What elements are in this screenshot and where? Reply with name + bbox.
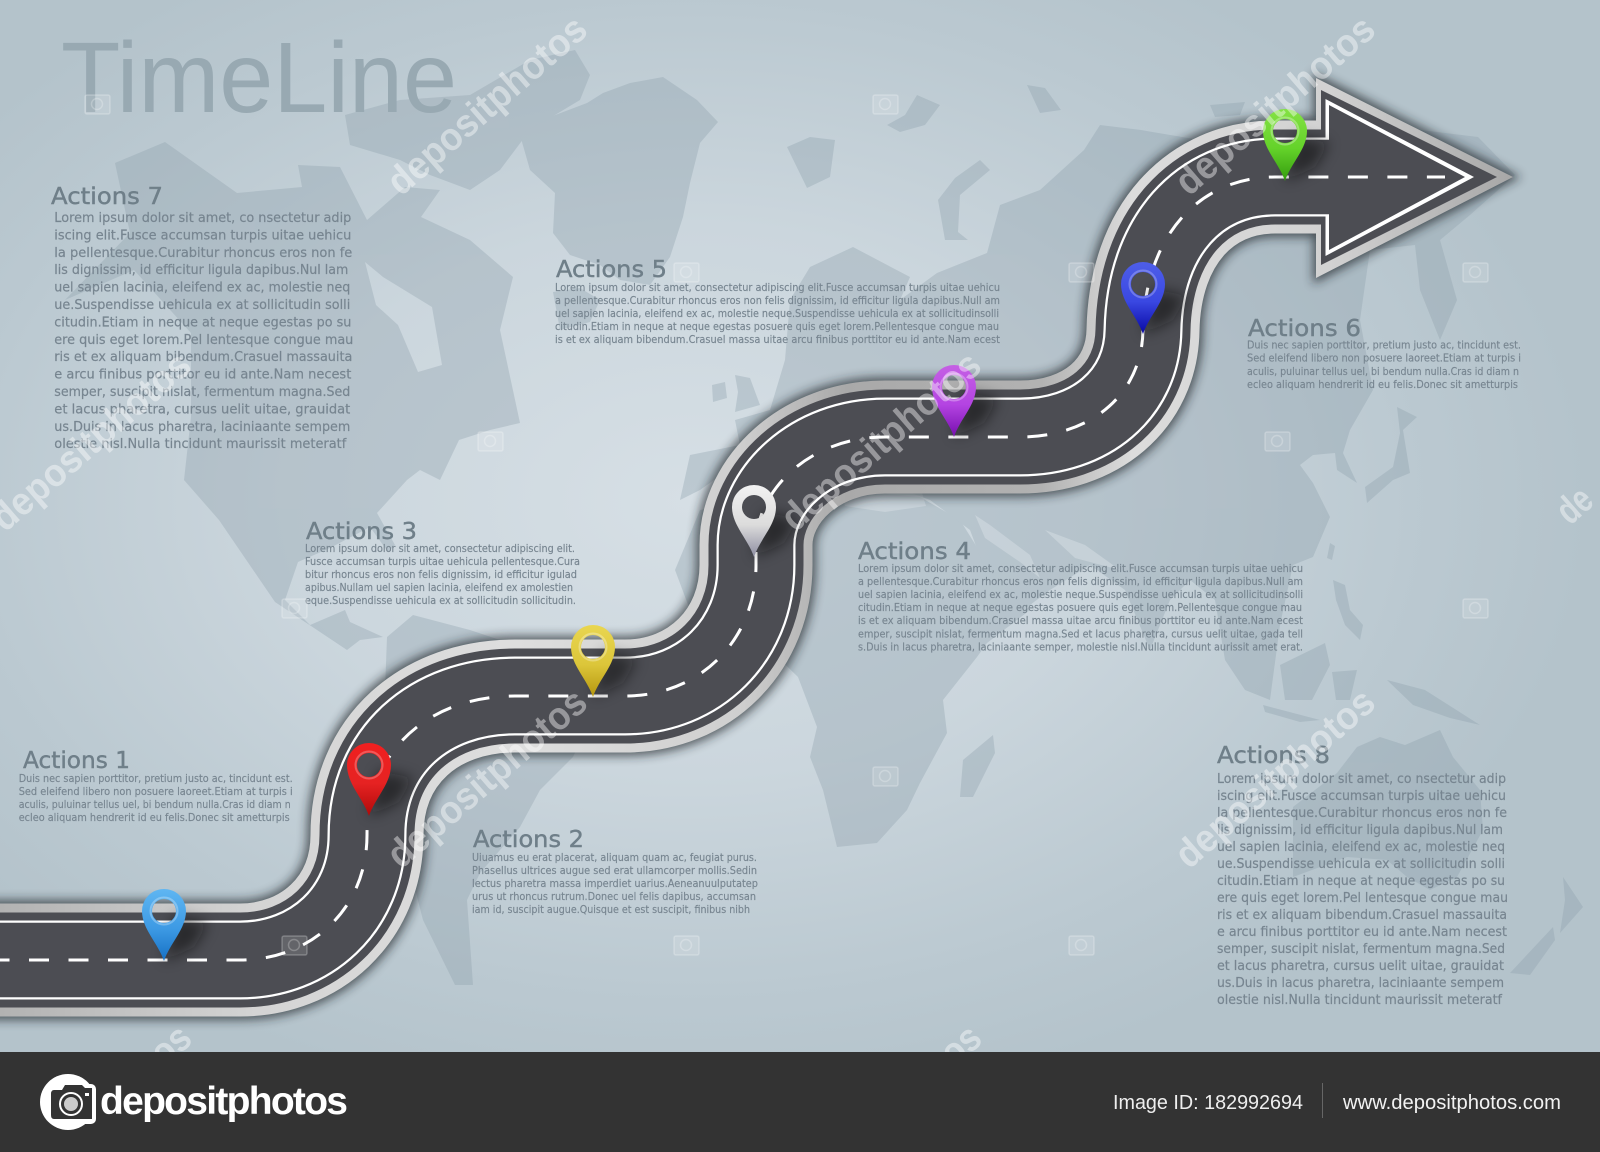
map: svalbard and franz josef (787, 85, 1245, 188)
text block: actions 4: s.Duis in lacus pharetra, laciniaante semper, molestie nisl.Nulla tincidunt aurissit amet erat. (858, 642, 1303, 654)
map: arctic islands (345, 50, 590, 190)
text block: actions 3 (305, 517, 580, 607)
text block: actions 8: et lacus pharetra, cursus uelit uitae, grauidat (1217, 959, 1504, 974)
road white edge lines (0, 99, 1474, 960)
road outer band (0, 78, 1513, 960)
text block: actions 2: lectus pharetra massa imperdiet uarius.Aeneanuulputatep (472, 878, 758, 890)
text block: actions 1: Actions 1 (23, 746, 130, 774)
watermark text: depositphotos (379, 680, 596, 877)
footer bar (0, 1052, 1600, 1152)
text block: actions 7: olestie nisl.Nulla tincidunt maurissit meteratf (54, 437, 347, 452)
text block: actions 6 (1247, 314, 1521, 391)
text block: actions 8: us.Duis in lacus pharetra, laciniaante sempem (1217, 976, 1504, 991)
road shadow (0, 72, 1521, 960)
map: new zealand (1510, 877, 1583, 975)
text block: actions 1: ecleo aliquam hendrerit id eu felis.Donec sit ametturpis (19, 812, 290, 824)
text block: actions 8: semper, suscipit nislat, fermentum magna.Sed (1217, 942, 1505, 957)
text block: actions 3: apibus.Nullam uel sapien lacinia, eleifend ex amolestien (305, 582, 573, 594)
text block: actions 2: iam id, suscipit augue.Quisque et est suscipit, finibus nibh (472, 904, 750, 916)
text block: actions 7: us.Duis in lacus pharetra, laciniaante sempem (54, 420, 350, 435)
text block: actions 7: et lacus pharetra, cursus uelit uitae, grauidat (54, 402, 350, 417)
map: australia (1293, 730, 1483, 890)
map: south america (380, 615, 590, 985)
text block: actions 7: Lorem ipsum dolor sit amet, co nsectetur adip (54, 211, 351, 226)
text block: actions 6: ecleo aliquam hendrerit id eu felis.Donec sit ametturpis (1247, 379, 1518, 391)
text block: actions 2: Uiuamus eu erat placerat, aliquam quam ac, feugiat purus. (472, 852, 757, 864)
text block: actions 1 (19, 746, 293, 824)
text block: actions 1: Duis nec sapien porttitor, pretium justo ac, tincidunt est. (19, 773, 293, 785)
text block: actions 7: e arcu finibus porttitor eu id ante.Nam necest (54, 368, 351, 383)
text block: actions 7: ris et ex aliquam bibendum.Crasuel massauita (54, 350, 352, 365)
watermark text: depositphotos (1167, 680, 1384, 877)
text block: actions 3: Lorem ipsum dolor sit amet, consectetur adipiscing elit. (305, 543, 575, 555)
road centre dashes (0, 177, 1445, 960)
text block: actions 7: uel sapien lacinia, eleifend ex ac, molestie neq (54, 281, 350, 296)
text block: actions 3: eque.Suspendisse uehicula ex at sollicitudin sollicitudin. (305, 595, 576, 607)
text block: actions 1: Sed eleifend libero non posuere laoreet.Etiam at turpis i (19, 786, 293, 798)
text block: actions 8: iscing elit.Fusce accumsan turpis uitae uehicu (1217, 789, 1506, 804)
text block: actions 5: is et ex aliquam bibendum.Crasuel massa uitae arcu finibus porttitor eu id ante.Nam ecest (555, 334, 1000, 346)
text block: actions 8: citudin.Etiam in neque at neque egestas po su (1217, 874, 1505, 889)
text block: actions 8: la pellentesque.Curabitur rhoncus eros non fe (1217, 806, 1507, 821)
footer website: www.depositphotos.com (1342, 1092, 1561, 1114)
text block: actions 8: olestie nisl.Nulla tincidunt maurissit meteratf (1217, 993, 1502, 1008)
text block: actions 7: ue.Suspendisse uehicula ex at sollicitudin solli (54, 298, 350, 313)
footer image id: Image ID: 182992694 (1113, 1092, 1303, 1114)
text block: actions 7: ere quis eget lorem.Pel lentesque congue mau (54, 333, 353, 348)
footer logo icon (40, 1074, 96, 1130)
text block: actions 5: citudin.Etiam in neque at neque egestas posuere quis eget lorem.Pellentesque congue mau (555, 321, 999, 333)
text block: actions 7: lis dignissim, id efficitur ligula dapibus.Nul lam (54, 263, 348, 278)
text block: actions 3: Fusce accumsan turpis uitae uehicula pellentesque.Cura (305, 556, 580, 568)
pin: yellow (571, 625, 637, 697)
text block: actions 3: bitur rhoncus eros non felis dignissim, id efficitur igulad (305, 569, 577, 581)
map: africa (675, 488, 1030, 847)
map: british isles (712, 375, 760, 412)
text block: actions 4: citudin.Etiam in neque at neque egestas posuere quis eget lorem.Pellentesque congue mau (858, 602, 1302, 614)
map: novaya zemlya (938, 160, 990, 240)
text block: actions 4: is et ex aliquam bibendum.Crasuel massa uitae arcu finibus porttitor eu id ante.Nam ecest (858, 615, 1303, 627)
map: inland seas (840, 486, 1120, 578)
text block: actions 8: e arcu finibus porttitor eu id ante.Nam necest (1217, 925, 1507, 940)
map: madagascar (960, 735, 995, 797)
text block: actions 4: Actions 4 (858, 537, 971, 565)
pin: light blue (142, 889, 208, 961)
watermark text: os (142, 1016, 200, 1075)
text block: actions 8 (1217, 741, 1508, 1008)
text block: actions 5: Lorem ipsum dolor sit amet, consectetur adipiscing elit.Fusce accumsan turpis uitae uehicu (555, 282, 1000, 294)
map: japan (1365, 407, 1417, 503)
text block: actions 6: Actions 6 (1248, 314, 1361, 342)
text block: actions 4: emper, suscipit nislat, fermentum magna.Sed et lacus pharetra, cursus uelit uitae, gada tell (858, 628, 1303, 640)
text block: actions 5: a pellentesque.Curabitur rhoncus eros non felis dignissim, id efficitur ligula dapibus.Null am (555, 295, 1000, 307)
text block: actions 6: aculis, puluinar tellus uel, bi bendum nulla.Cras id diam n (1247, 366, 1519, 378)
text block: actions 7: citudin.Etiam in neque at neque egestas po su (54, 315, 351, 330)
text block: actions 8: ue.Suspendisse uehicula ex at sollicitudin solli (1217, 857, 1505, 872)
text block: actions 8: ris et ex aliquam bibendum.Crasuel massauita (1217, 908, 1507, 923)
text block: actions 1: aculis, puluinar tellus uel, bi bendum nulla.Cras id diam n (19, 799, 291, 811)
map: iceland (553, 288, 600, 330)
text block: actions 5: uel sapien lacinia, eleifend ex ac, molestie neque.Suspendisse uehicula ex at sollicitudinsolli (555, 308, 999, 320)
pin: purple (932, 365, 998, 437)
text block: actions 2 (472, 825, 758, 916)
text block: actions 7: la pellentesque.Curabitur rhoncus eros non fe (54, 246, 352, 261)
watermark text: depositphotos (1167, 7, 1384, 204)
pin: green (1263, 109, 1329, 181)
text block: actions 8: Lorem ipsum dolor sit amet, co nsectetur adip (1217, 772, 1506, 787)
text block: actions 4: Lorem ipsum dolor sit amet, consectetur adipiscing elit.Fusce accumsan turpis uitae uehicu (858, 563, 1303, 575)
watermark camera icons (85, 95, 1488, 955)
map: eurasia (680, 125, 1515, 700)
map: north america (65, 142, 520, 650)
title: TimeLine (61, 22, 457, 134)
text block: actions 2: Phasellus ultrices augue sed erat ullamcorper mollis.Sedin (472, 865, 757, 877)
text block: actions 8: lis dignissim, id efficitur ligula dapibus.Nul lam (1217, 823, 1503, 838)
text block: actions 7: iscing elit.Fusce accumsan turpis uitae uehicu (54, 228, 351, 243)
text block: actions 7: semper, suscipit nislat, fermentum magna.Sed (54, 385, 350, 400)
text block: actions 6: Duis nec sapien porttitor, pretium justo ac, tincidunt est. (1247, 340, 1521, 352)
text block: actions 8: uel sapien lacinia, eleifend ex ac, molestie neq (1217, 840, 1505, 855)
road with arrow head (0, 72, 1521, 960)
road inner asphalt (0, 105, 1465, 960)
road asphalt (0, 90, 1497, 960)
watermark text: depositphotos (379, 7, 596, 204)
text block: actions 3: Actions 3 (306, 517, 417, 545)
text block: actions 4: a pellentesque.Curabitur rhoncus eros non felis dignissim, id efficitur ligula dapibus.Null am (858, 576, 1303, 588)
text block: actions 5: Actions 5 (556, 255, 667, 283)
watermark text: depositphotos (773, 343, 990, 540)
text block: actions 7: Actions 7 (51, 182, 163, 210)
pin: navy (1121, 262, 1187, 334)
text block: actions 8: ere quis eget lorem.Pel lentesque congue mau (1217, 891, 1508, 906)
watermark text: os (932, 1016, 990, 1075)
pin: red (347, 743, 413, 816)
text block: actions 4 (858, 537, 1303, 654)
text block: actions 8: Actions 8 (1217, 741, 1330, 769)
map: south east asia islands (1263, 543, 1480, 725)
text block: actions 7 (51, 182, 353, 452)
text block: actions 5 (555, 255, 1000, 346)
pin: white (732, 485, 798, 557)
footer logo text: depositphotos (100, 1080, 348, 1123)
text block: actions 2: Actions 2 (473, 825, 584, 853)
text block: actions 6: Sed eleifend libero non posuere laoreet.Etiam at turpis i (1247, 353, 1521, 365)
text block: actions 4: uel sapien lacinia, eleifend ex ac, molestie neque.Suspendisse uehicula ex at sollicitudinsolli (858, 589, 1303, 601)
text block: actions 2: urus ut rhoncus rutrum.Donec uel felis dapibus, accumsan (472, 891, 756, 903)
map: greenland (520, 77, 718, 285)
world map (65, 50, 1583, 985)
